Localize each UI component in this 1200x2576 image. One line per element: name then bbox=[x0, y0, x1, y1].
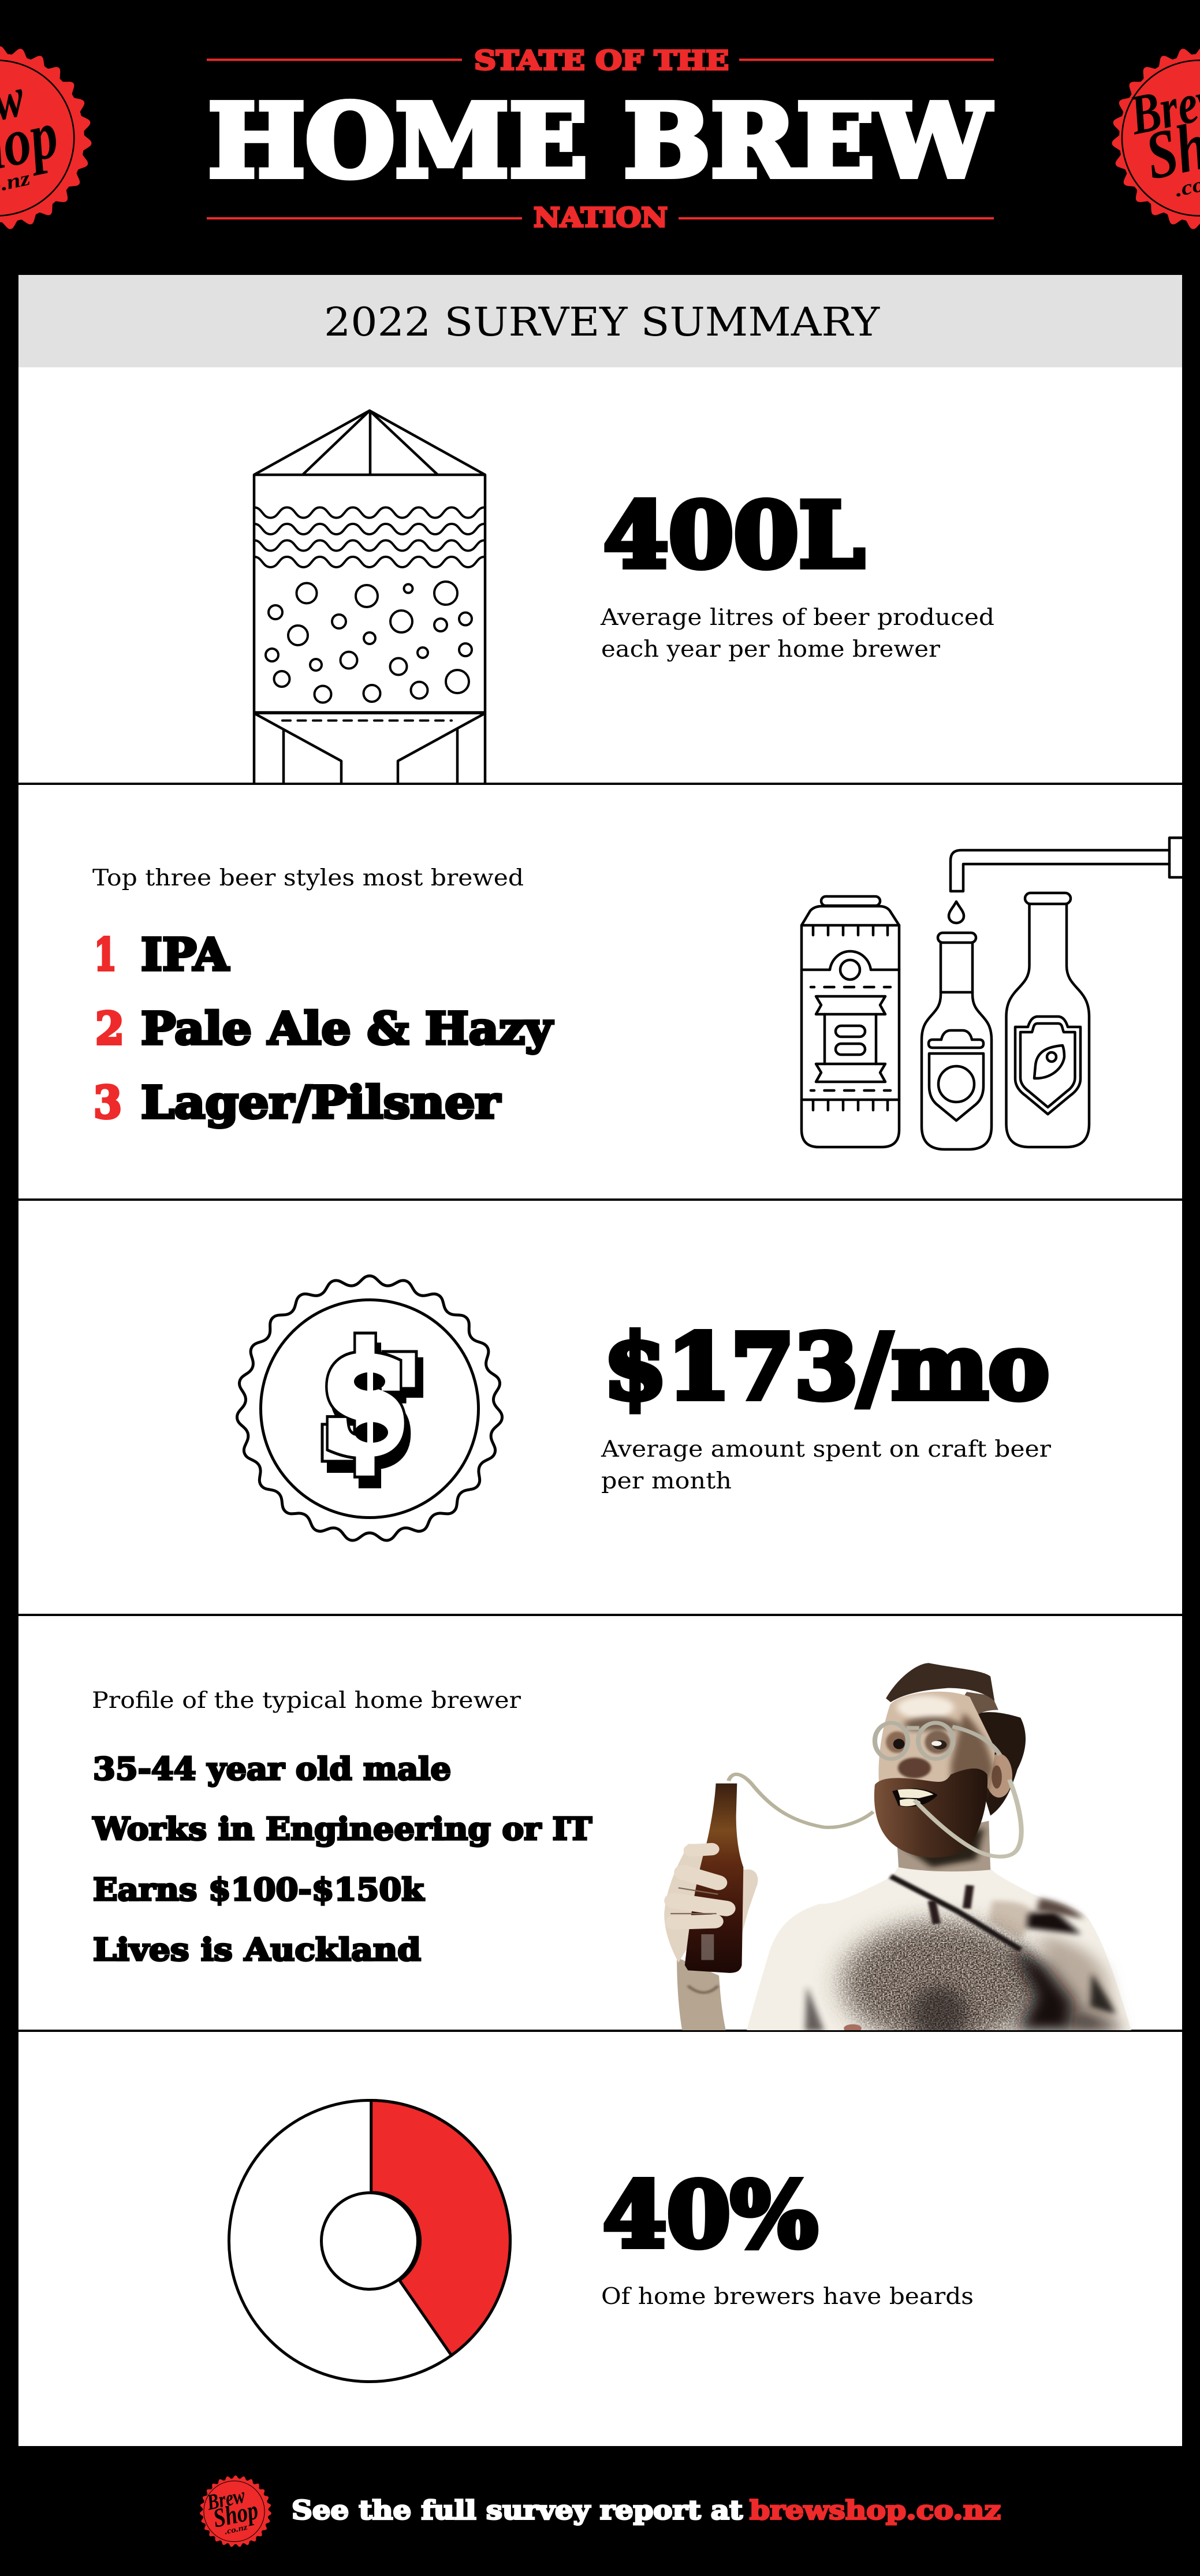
shaved temple bbox=[964, 1692, 998, 1714]
icon: can, bottles and tap bbox=[802, 837, 1182, 1149]
hair bbox=[886, 1663, 994, 1702]
list: profile traits: Works in Engineering or IT bbox=[92, 1811, 592, 1847]
list: profile traits: Earns $100-$150k bbox=[93, 1872, 424, 1908]
chart: donut 40% bbox=[229, 2100, 510, 2382]
text: profile heading: Profile of the typical home brewer bbox=[92, 1688, 521, 1714]
icon: tap bbox=[951, 837, 1182, 891]
text: spend description: per month bbox=[601, 1468, 732, 1494]
logo: footer bottle cap: .co.nz bbox=[224, 2523, 248, 2537]
icon: small bottle bbox=[922, 933, 992, 1149]
face bbox=[878, 1691, 995, 1789]
torso bbox=[747, 1855, 1131, 2031]
tube from mouth bbox=[914, 1780, 1022, 1856]
text: beard description: Of home brewers have beards bbox=[601, 2284, 974, 2310]
icon: bottle cap dollar: $ bbox=[322, 1316, 409, 1482]
text: styles heading: Top three beer styles most brewed bbox=[92, 865, 524, 891]
back hair bbox=[978, 1712, 1026, 1816]
logo: footer bottle cap: Shop bbox=[211, 2495, 260, 2533]
list: profile traits: 35-44 year old male bbox=[93, 1751, 451, 1787]
heading: 2022 survey summary: 2022 SURVEY SUMMARY bbox=[324, 300, 880, 345]
logo: footer bottle cap bbox=[200, 2476, 271, 2548]
list: profile traits: Lives is Auckland bbox=[93, 1932, 421, 1968]
text: litres description: Average litres of beer produced bbox=[600, 605, 994, 631]
title: home brew: HOME BREW bbox=[208, 83, 992, 200]
stat: $173/mo: $173/mo bbox=[603, 1314, 1049, 1420]
tube from bottle bbox=[729, 1774, 873, 1827]
panel: litres produced bbox=[254, 411, 994, 784]
chest hair bbox=[843, 1922, 1039, 2045]
straw glasses bbox=[875, 1723, 1000, 1759]
panel: top beer styles bbox=[92, 837, 1182, 1149]
list: style 1: IPA bbox=[141, 929, 229, 981]
icon: can bbox=[802, 896, 899, 1147]
text: litres description: each year per home brewer bbox=[601, 636, 940, 662]
torso shading bbox=[989, 1901, 1037, 1940]
list: profile traits bbox=[92, 1751, 592, 1968]
panel: monthly spend bbox=[236, 1276, 1051, 1543]
list: style 3: Lager/Pilsner bbox=[141, 1077, 501, 1129]
list: style 2: 2 bbox=[95, 1003, 124, 1055]
panel: typical brewer profile bbox=[92, 1663, 1131, 2045]
panel: summary heading band bbox=[18, 275, 1182, 367]
list: style 1: 1 bbox=[94, 929, 117, 981]
stat: 400L: 400L bbox=[603, 482, 864, 588]
forearm bbox=[677, 1957, 726, 2031]
text: litres description bbox=[600, 605, 994, 662]
icon: bottle cap dollar: $ bbox=[322, 1316, 409, 1482]
icon: bottle cap dollar: $ bbox=[327, 1326, 413, 1492]
logo: right bottle cap bbox=[1111, 46, 1200, 230]
text: spend description bbox=[601, 1436, 1051, 1494]
mouth bbox=[892, 1788, 938, 1807]
text: footer link: brewshop.co.nz bbox=[750, 2495, 1001, 2525]
header bbox=[0, 44, 1200, 233]
palm behind bottle bbox=[664, 1844, 758, 1963]
neck bbox=[897, 1821, 990, 1871]
icon: drop bbox=[949, 902, 964, 923]
nose bbox=[898, 1758, 931, 1778]
list: style 3: 3 bbox=[94, 1077, 122, 1129]
panel: beards bbox=[229, 2100, 974, 2382]
icon: fermenter tank bbox=[254, 411, 485, 784]
eye sockets and eyes bbox=[886, 1732, 908, 1753]
icon: bottle cap dollar bbox=[236, 1276, 503, 1543]
fingers bbox=[674, 1849, 726, 1923]
ear bbox=[986, 1754, 1012, 1797]
logo: left bottle cap bbox=[0, 46, 92, 230]
beard bbox=[874, 1769, 987, 1857]
footer bbox=[200, 2476, 1001, 2548]
title: state of the: STATE OF THE bbox=[474, 44, 729, 76]
icon: dollar counters bbox=[354, 1369, 388, 1446]
logo: footer bottle cap: Brew bbox=[204, 2484, 247, 2515]
image: man drinking beer through straw glasses bbox=[664, 1663, 1131, 2045]
bottle bbox=[685, 1784, 743, 1973]
icon: large bottle bbox=[1006, 893, 1089, 1147]
list: style 1 bbox=[94, 929, 229, 981]
title: nation: NATION bbox=[534, 202, 668, 233]
text: spend description: Average amount spent on craft beer bbox=[601, 1436, 1051, 1462]
stat: 40%: 40% bbox=[603, 2162, 818, 2268]
text: footer call to action: See the full survey report at bbox=[292, 2495, 743, 2525]
torso shadows bbox=[1011, 1945, 1074, 2031]
list: style 2: Pale Ale & Hazy bbox=[141, 1003, 553, 1055]
